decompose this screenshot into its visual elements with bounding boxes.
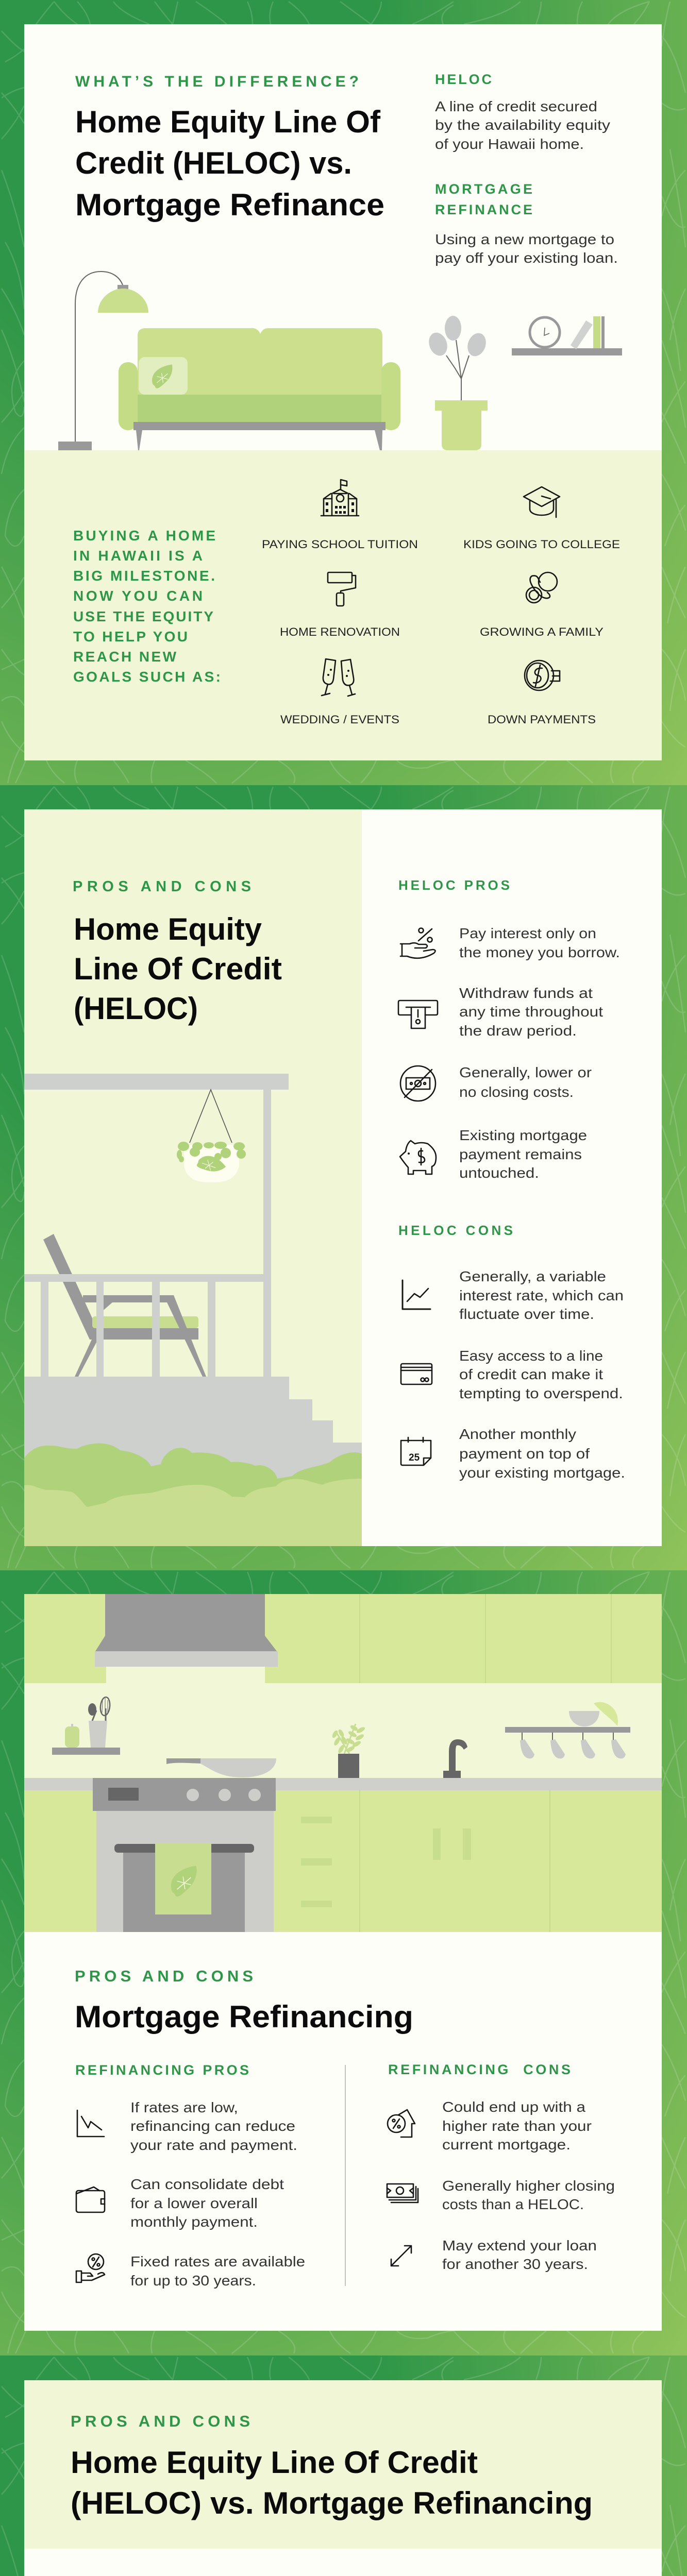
- text: rates low: your rate and payment.: [130, 2137, 297, 2153]
- panel: section 2 background band: [0, 785, 687, 1570]
- cabinet handles: [301, 1817, 471, 1907]
- panel: mortgage refinancing: [24, 1932, 662, 2331]
- definition: mortgage refinance: REFINANCE: [435, 202, 532, 217]
- definition: mortgage refinance: pay off your existing loan.: [435, 250, 618, 266]
- text: easy access: [459, 1348, 623, 1401]
- text: existing mortgage: untouched.: [459, 1165, 539, 1181]
- definition: mortgage refinance: [435, 181, 618, 266]
- sofa pillow with leaf: [139, 357, 188, 395]
- right shelf with bowl and hanging mugs: [505, 1702, 630, 1758]
- text: fixed rates: Fixed rates are available: [130, 2253, 305, 2269]
- text: withdraw funds: any time throughout: [459, 1004, 603, 1020]
- icon: diagonal double arrow: [391, 2246, 411, 2266]
- text: easy access: of credit can make it: [459, 1366, 603, 1382]
- icon: percent with up arrow: [388, 2110, 415, 2137]
- range hood: [95, 1594, 278, 1683]
- title: home equity line of credit vs mortgage refinance: Home Equity Line Of: [75, 105, 381, 139]
- illustration: floor lamp: [58, 272, 148, 450]
- eyebrow: what's the difference: WHAT’S THE DIFFERENCE?: [75, 73, 359, 90]
- text: buying a home in hawaii: BIG MILESTONE.: [73, 568, 215, 584]
- text: another payment: your existing mortgage.: [459, 1465, 625, 1481]
- text: extend loan: [442, 2238, 597, 2272]
- text: higher closing costs: Generally higher closing: [442, 2178, 615, 2194]
- definition: HELOC: of your Hawaii home.: [435, 136, 584, 152]
- text: rates low: If rates are low,: [130, 2099, 238, 2115]
- text: rates low: [130, 2099, 297, 2153]
- illustration: porch structure: [24, 1074, 362, 1546]
- title: HELOC vs mortgage refinancing: Home Equity Line Of Credit: [71, 2445, 478, 2480]
- eyebrow: pros and cons: PROS AND CONS: [71, 2412, 250, 2430]
- definition: HELOC: by the availability equity: [435, 117, 610, 133]
- title: home equity line of credit vs mortgage refinance: Credit (HELOC) vs.: [75, 146, 352, 180]
- label: growing a family: GROWING A FAMILY: [480, 625, 604, 638]
- text: higher rate: Could end up with a: [442, 2099, 585, 2115]
- title: HELOC vs mortgage refinancing: [71, 2445, 593, 2520]
- text: withdraw funds: Withdraw funds at: [459, 985, 593, 1001]
- dish towel with leaf: [155, 1843, 211, 1914]
- text: pay interest only: Pay interest only on: [459, 925, 596, 941]
- label: home renovation: HOME RENOVATION: [280, 625, 400, 638]
- subheading: HELOC cons: HELOC CONS: [398, 1223, 513, 1238]
- text: higher rate: current mortgage.: [442, 2137, 571, 2153]
- subheading: refinancing cons: REFINANCING CONS: [388, 2062, 571, 2077]
- definition: HELOC: A line of credit secured: [435, 98, 597, 114]
- icon: percent coin over hand: [76, 2254, 105, 2282]
- text: withdraw funds: the draw period.: [459, 1023, 577, 1039]
- title: home equity line of credit: (HELOC): [74, 991, 198, 1026]
- icon: credit card: [401, 1364, 432, 1384]
- text: extend loan: May extend your loan: [442, 2238, 597, 2253]
- text: consolidate debt: monthly payment.: [130, 2214, 258, 2230]
- text: buying a home in hawaii: GOALS SUCH AS:: [73, 669, 221, 685]
- text: withdraw funds: [459, 985, 603, 1039]
- title: home equity line of credit vs mortgage refinance: [75, 105, 384, 222]
- subheading: HELOC pros: HELOC PROS: [398, 877, 510, 893]
- icon: champagne glasses: [322, 659, 355, 696]
- text: easy access: tempting to overspend.: [459, 1385, 623, 1401]
- definition: HELOC: HELOC: [435, 72, 492, 87]
- text: fixed rates: for up to 30 years.: [130, 2273, 256, 2289]
- eyebrow: pros and cons: PROS AND CONS: [75, 1967, 253, 1985]
- eyebrow: pros and cons: PROS AND CONS: [73, 878, 251, 895]
- icon: coins: [525, 660, 560, 690]
- faucet: [443, 1739, 467, 1778]
- text: consolidate debt: [130, 2176, 284, 2230]
- text: lower closing costs: [459, 1064, 592, 1100]
- text: higher rate: [442, 2099, 592, 2153]
- icon: pacifier: [526, 572, 557, 603]
- text: another payment: [459, 1426, 625, 1481]
- stove and oven: [93, 1778, 276, 1932]
- panel: section 4 background band: [0, 2355, 687, 2576]
- text: buying a home in hawaii: IN HAWAII IS A: [73, 548, 203, 564]
- text: existing mortgage: [459, 1127, 587, 1181]
- text: higher rate: higher rate than your: [442, 2118, 592, 2134]
- text: variable rate: fluctuate over time.: [459, 1306, 594, 1322]
- text: extend loan: for another 30 years.: [442, 2256, 588, 2272]
- definition: HELOC: [435, 72, 610, 152]
- illustration: bushes: [24, 1443, 362, 1546]
- title: HELOC vs mortgage refinancing: (HELOC) vs. Mortgage Refinancing: [71, 2486, 593, 2520]
- icon: calendar: [401, 1437, 431, 1465]
- text: lower closing costs: no closing costs.: [459, 1084, 574, 1100]
- title: home equity line of credit vs mortgage refinance: Mortgage Refinance: [75, 188, 384, 222]
- frying pan: [166, 1758, 276, 1777]
- panel: HELOC pros and cons list: [362, 809, 662, 1546]
- illustration: hanging planter: [177, 1090, 246, 1182]
- definition: mortgage refinance: Using a new mortgage to: [435, 231, 614, 247]
- text: pay interest only: [459, 925, 620, 960]
- text: higher closing costs: [442, 2178, 615, 2212]
- text: easy access: Easy access to a line: [459, 1348, 603, 1364]
- icon: school: [321, 480, 359, 516]
- icon: percent in hand: [400, 928, 435, 958]
- text: variable rate: [459, 1268, 624, 1322]
- icon: graduation cap: [524, 487, 560, 517]
- text: lower closing costs: Generally, lower or: [459, 1064, 592, 1080]
- text: buying a home in hawaii: NOW YOU CAN: [73, 588, 203, 604]
- text: another payment: payment on top of: [459, 1446, 590, 1462]
- label: wedding / events: WEDDING / EVENTS: [280, 713, 399, 726]
- title: home equity line of credit: Line Of Credit: [74, 952, 282, 986]
- icon: piggy bank: [400, 1141, 436, 1174]
- title: home equity line of credit: [74, 912, 282, 1026]
- illustration: shelf with clock and books: [512, 316, 622, 355]
- illustration: porch chair: [43, 1234, 206, 1377]
- text: fixed rates: [130, 2253, 305, 2289]
- title: home equity line of credit: Home Equity: [74, 912, 262, 946]
- text: variable rate: Generally, a variable: [459, 1268, 606, 1284]
- illustration: sofa: [119, 328, 400, 450]
- icon: calendar: 25: [409, 1452, 420, 1463]
- panel: comparison lists: [24, 2549, 662, 2576]
- definition: mortgage refinance: MORTGAGE: [435, 181, 532, 197]
- left shelf with bottle and utensils: [52, 1697, 120, 1755]
- text: buying a home in hawaii: [73, 528, 221, 685]
- text: buying a home in hawaii: REACH NEW: [73, 649, 177, 665]
- icon: atm cash withdrawal: [398, 1001, 438, 1028]
- panel: section 1 background band: [0, 0, 687, 785]
- text: buying a home in hawaii: BUYING A HOME: [73, 528, 215, 544]
- label: kids going to college: KIDS GOING TO COLLEGE: [463, 538, 620, 551]
- panel: goals: [24, 450, 662, 760]
- illustration: kitchen: [24, 1594, 662, 1932]
- text: buying a home in hawaii: TO HELP YOU: [73, 629, 188, 645]
- text: consolidate debt: for a lower overall: [130, 2195, 258, 2211]
- text: rates low: refinancing can reduce: [130, 2118, 295, 2134]
- text: pay interest only: the money you borrow.: [459, 944, 620, 960]
- icon: paint roller: [328, 572, 356, 606]
- icon: falling chart: [77, 2110, 104, 2137]
- label: down payments: DOWN PAYMENTS: [488, 713, 596, 726]
- panel: HELOC porch illustration: [24, 809, 362, 1546]
- text: existing mortgage: Existing mortgage: [459, 1127, 587, 1143]
- text: consolidate debt: Can consolidate debt: [130, 2176, 284, 2192]
- text: variable rate: interest rate, which can: [459, 1287, 624, 1303]
- label: paying school tuition: PAYING SCHOOL TUITION: [262, 538, 418, 551]
- text: higher closing costs: costs than a HELOC.: [442, 2196, 584, 2212]
- subheading: refinancing pros: REFINANCING PROS: [75, 2062, 249, 2078]
- icon: stack of money: [387, 2184, 418, 2202]
- herb plant: [331, 1724, 366, 1778]
- text: buying a home in hawaii: USE THE EQUITY: [73, 608, 213, 624]
- illustration: potted plant: [426, 316, 489, 450]
- panel: what's the difference: [24, 24, 662, 450]
- panel: comparison header: [24, 2380, 662, 2549]
- text: another payment: Another monthly: [459, 1426, 576, 1442]
- icon: no closing costs: [400, 1066, 435, 1101]
- text: existing mortgage: payment remains: [459, 1146, 582, 1162]
- title: mortgage refinancing: Mortgage Refinancing: [75, 1999, 413, 2034]
- icon: line chart: [403, 1280, 430, 1309]
- panel: section 3 background band: [0, 1570, 687, 2355]
- icon: wallet: [76, 2187, 105, 2212]
